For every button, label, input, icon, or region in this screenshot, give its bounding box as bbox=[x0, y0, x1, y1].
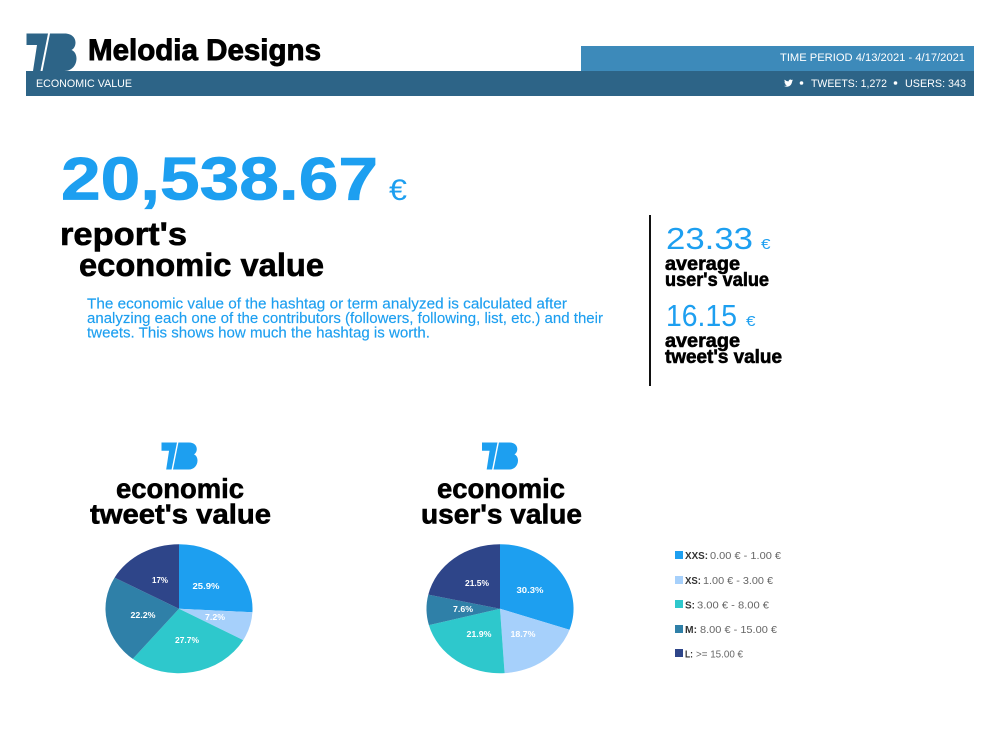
pie chart bbox=[105, 544, 253, 673]
legend item XXS: 0.00 € - 1.00 € bbox=[710, 550, 781, 562]
header bbox=[26, 34, 974, 96]
heading line two: tweet's value bbox=[90, 498, 271, 530]
users count: USERS: 343 bbox=[905, 78, 966, 90]
pie chart bbox=[427, 544, 574, 673]
legend item XS bbox=[675, 575, 773, 587]
user value label bbox=[665, 253, 769, 291]
user value label: user's value bbox=[665, 269, 769, 291]
pie labels bbox=[130, 575, 225, 645]
user value label: average bbox=[665, 253, 740, 275]
pie labels: 21.5% bbox=[465, 578, 489, 588]
legend item M: M: bbox=[685, 624, 697, 636]
pie labels bbox=[453, 578, 544, 639]
pie labels: 18.7% bbox=[510, 629, 536, 639]
icon: logo bbox=[482, 442, 518, 470]
time period bar bbox=[581, 46, 974, 71]
vertical divider bbox=[649, 215, 651, 386]
tweets count: TWEETS: 1,272 bbox=[811, 78, 887, 90]
bullet bbox=[894, 81, 897, 85]
section label: ECONOMIC VALUE bbox=[36, 78, 132, 90]
pie labels: 7.6% bbox=[453, 604, 473, 614]
heading line one: report's bbox=[60, 216, 187, 252]
euro sign: € bbox=[746, 313, 756, 330]
pie labels: 27.7% bbox=[175, 635, 199, 645]
main value block bbox=[60, 146, 603, 342]
description: tweets. This shows how much the hashtag is worth. bbox=[87, 324, 430, 342]
pie labels: 7.2% bbox=[205, 612, 225, 622]
legend item L: >= 15.00 € bbox=[696, 648, 743, 660]
euro sign: € bbox=[761, 236, 771, 253]
legend item XS: 1.00 € - 3.00 € bbox=[703, 575, 773, 587]
tweet value label: average bbox=[665, 330, 740, 352]
pie labels: 25.9% bbox=[192, 581, 220, 591]
euro sign: € bbox=[389, 174, 407, 207]
heading line two: economic value bbox=[79, 247, 324, 283]
pie labels: 30.3% bbox=[516, 585, 544, 595]
description bbox=[87, 296, 603, 342]
legend bbox=[675, 550, 781, 660]
legend item XS: XS: bbox=[685, 575, 701, 587]
tweet value label bbox=[665, 330, 782, 368]
bullet bbox=[800, 81, 803, 85]
description: The economic value of the hashtag or term analyzed is calculated after bbox=[87, 296, 567, 312]
legend item M: 8.00 € - 15.00 € bbox=[700, 624, 777, 636]
icon: twitter bird bbox=[784, 80, 793, 87]
heading line one: economic bbox=[116, 473, 244, 504]
legend item XXS: XXS: bbox=[685, 550, 708, 562]
tweet value label: tweet's value bbox=[665, 346, 782, 368]
heading line two: user's value bbox=[421, 498, 582, 530]
pie labels: 17% bbox=[152, 575, 168, 585]
average user value: 23.33 bbox=[666, 221, 753, 256]
legend item L: L: bbox=[685, 648, 693, 660]
average tweet value: 16.15 bbox=[666, 298, 737, 333]
panel: economic tweet's value bbox=[90, 442, 271, 673]
pie labels: 21.9% bbox=[466, 629, 492, 639]
big number: 20,538.67 bbox=[61, 146, 378, 212]
legend item S: S: bbox=[685, 600, 695, 612]
logo bbox=[26, 34, 76, 71]
time period: TIME PERIOD 4/13/2021 - 4/17/2021 bbox=[780, 52, 965, 64]
header dark bar bbox=[26, 71, 974, 96]
side statistics bbox=[649, 215, 782, 386]
legend item S: 3.00 € - 8.00 € bbox=[697, 600, 769, 612]
legend item L bbox=[675, 648, 743, 660]
description: analyzing each one of the contributors (followers, following, list, etc.) and their bbox=[87, 310, 603, 327]
brand name: Melodia Designs bbox=[88, 34, 321, 67]
icon: logo bbox=[162, 442, 198, 470]
pie labels: 22.2% bbox=[130, 610, 156, 620]
heading line one: economic bbox=[437, 473, 565, 504]
panel: economic user's value bbox=[421, 442, 582, 673]
legend item XXS bbox=[675, 550, 781, 562]
